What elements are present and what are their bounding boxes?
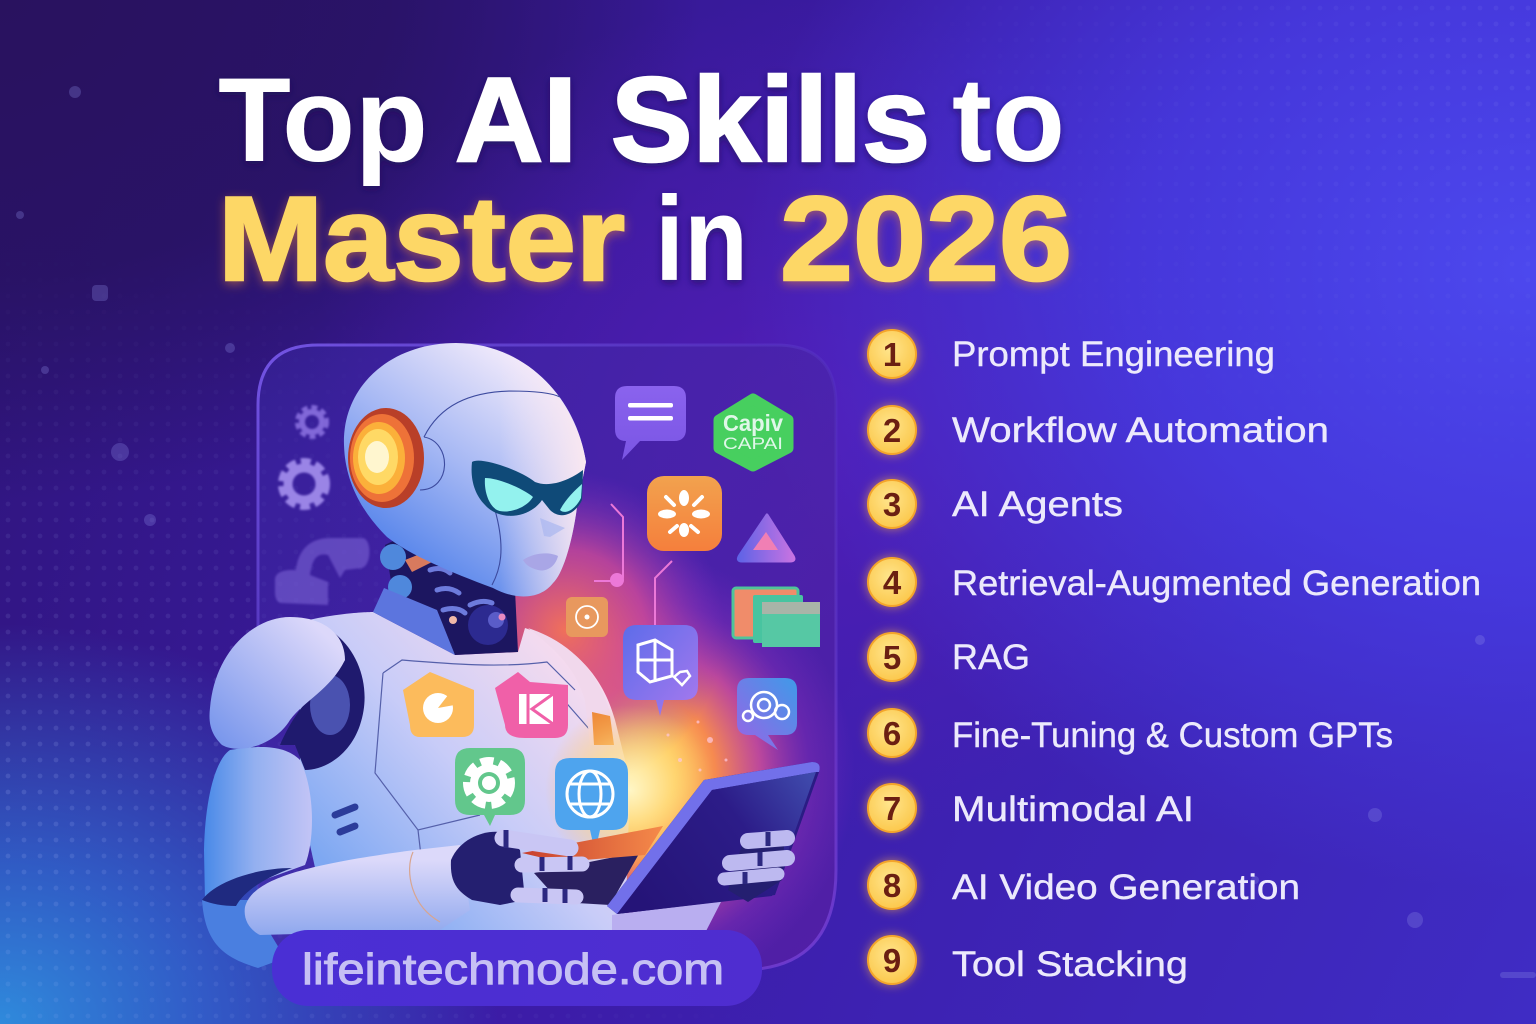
- orange glow behind robot: [405, 470, 855, 1000]
- icon: ghost arrows: [275, 538, 370, 605]
- robot right hand on keyboard: [451, 830, 582, 905]
- skill 6: [868, 709, 1393, 757]
- title line 1: Top AI Skills to: AI Skills: [455, 53, 930, 187]
- robot neck: [380, 505, 518, 655]
- title line 2: Master in 2026: in: [655, 172, 748, 306]
- robot left arm: [202, 617, 470, 968]
- skill 5: 5: [883, 639, 901, 676]
- icon: pink folder: [495, 672, 568, 738]
- skill 8: 8: [883, 867, 901, 904]
- skill 2: [868, 406, 1329, 454]
- icon: gradient triangle: [738, 515, 794, 561]
- title line 2: Master in 2026: 2026: [780, 172, 1072, 306]
- icon: small orange tile: [566, 597, 608, 637]
- skill 9: [868, 936, 1188, 984]
- sparks: [666, 720, 728, 772]
- title line 1: Top AI Skills to: to: [952, 53, 1065, 187]
- skill 8: AI Video Generation: [952, 868, 1300, 907]
- website pill: [272, 930, 762, 1006]
- robot torso: [300, 612, 722, 935]
- icon: green hexagon: CAPAI: [723, 434, 783, 453]
- robot mouth: [523, 518, 565, 570]
- skill 2: 2: [883, 412, 901, 449]
- skill 8: [868, 861, 1300, 909]
- icon: green hexagon: [719, 399, 788, 466]
- icon: target card: [737, 678, 797, 750]
- tablet: [607, 762, 820, 914]
- icon: chat bubble: [615, 386, 686, 460]
- glow over torso: [545, 705, 715, 875]
- skill 3: 3: [883, 486, 901, 523]
- circuit lines: [594, 504, 672, 625]
- skill 9: Tool Stacking: [952, 945, 1188, 984]
- icon: teal folders: [733, 588, 820, 647]
- skill 6: Fine-Tuning & Custom GPTs: [952, 716, 1393, 755]
- skill 4: Retrieval-Augmented Generation: [952, 564, 1481, 603]
- robot keyboard: [522, 826, 663, 905]
- robot left hand on tablet: [724, 830, 787, 902]
- skill 4: 4: [883, 564, 902, 601]
- robot collar: [373, 588, 508, 655]
- robot head: [344, 343, 586, 596]
- title line 1: Top AI Skills to: [218, 53, 1065, 187]
- skill 6: 6: [883, 715, 901, 752]
- robot: [202, 343, 820, 968]
- skill 5: [868, 633, 1030, 681]
- skills list: [868, 330, 1481, 984]
- icon: small gear: [297, 407, 327, 437]
- skill 3: [868, 480, 1123, 528]
- skill 5: RAG: [952, 638, 1030, 677]
- skill 7: Multimodal AI: [952, 790, 1194, 829]
- glass panel: [258, 345, 836, 970]
- skill 2: Workflow Automation: [952, 411, 1329, 450]
- skill 1: [868, 330, 1275, 378]
- skill 7: 7: [883, 790, 901, 827]
- robot ear light: [348, 408, 424, 508]
- title line 2: Master in 2026: [218, 172, 1072, 306]
- skill 4: [868, 558, 1481, 606]
- icon: orange spark tile: [647, 476, 722, 551]
- app icons on chest: [403, 672, 628, 852]
- skill 1: 1: [883, 336, 901, 373]
- robot visor: [472, 461, 583, 516]
- icon: yellow folder: [403, 672, 474, 737]
- panel: robot illustration: [202, 343, 855, 1000]
- title: [218, 53, 1072, 306]
- icon: blue globe card: [555, 758, 628, 852]
- title line 1: Top AI Skills to: Top: [218, 53, 428, 187]
- icon: map card: [623, 625, 698, 716]
- title line 2: Master in 2026: Master: [218, 172, 625, 306]
- skill 7: [868, 784, 1194, 832]
- icon: green hexagon: Capiv: [723, 410, 783, 436]
- skill 9: 9: [883, 942, 901, 979]
- website pill: lifeintechmode.com: [302, 945, 724, 994]
- skill 1: Prompt Engineering: [952, 335, 1275, 374]
- icon: green camera card: [455, 748, 525, 826]
- skill 3: AI Agents: [952, 485, 1123, 524]
- icon: large gear: [281, 461, 327, 507]
